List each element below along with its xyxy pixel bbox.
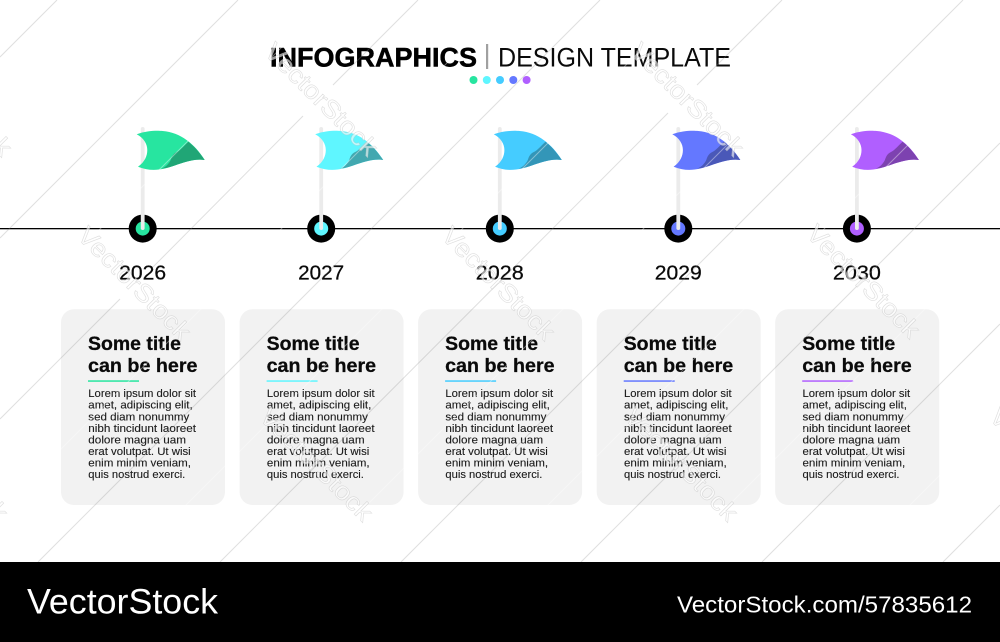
watermark: row 1: VectorStock — [259, 37, 384, 162]
panel: 2027 card: nibh tincidunt laoreet — [267, 423, 375, 435]
panel: 2027 card: quis nostrud exerci. — [267, 469, 364, 481]
year 2027: 2027 — [298, 262, 344, 284]
panel: 2026 card: sed diam nonummy — [88, 411, 190, 423]
panel: 2030 card — [775, 309, 939, 505]
panel: 2030 card: enim minim veniam, — [803, 457, 905, 469]
year 2028: 2028 — [476, 262, 524, 284]
milestone 2030 flag — [843, 127, 919, 243]
panel: 2027 card: dolore magna uam — [267, 434, 365, 446]
panel: 2028 card: nibh tincidunt laoreet — [445, 423, 553, 435]
panel: 2029 card: amet, adipiscing elit, — [624, 400, 728, 412]
panel: 2029 card: erat volutpat. Ut wisi — [624, 446, 726, 458]
watermark: row 3 — [0, 402, 1000, 527]
watermark: row 2 — [72, 219, 926, 346]
panel: 2028 card: erat volutpat. Ut wisi — [445, 446, 548, 458]
panel: 2028 card: quis nostrud exerci. — [445, 469, 542, 481]
panel: 2028 card: Some title — [445, 334, 538, 355]
title — [270, 42, 731, 72]
panel: 2029 card: can be here — [624, 356, 733, 377]
title: DESIGN TEMPLATE — [498, 42, 731, 72]
panel: 2026 card: amet, adipiscing elit, — [88, 400, 193, 412]
panel: 2030 card: amet, adipiscing elit, — [803, 400, 907, 412]
panel: 2026 card — [61, 309, 225, 505]
panel: 2028 card: amet, adipiscing elit, — [445, 400, 550, 412]
footer bar — [0, 562, 1000, 642]
watermark: row 3: VectorStock — [254, 402, 379, 527]
milestone 2029 flag — [664, 127, 740, 243]
watermark: row 2: VectorStock — [72, 221, 197, 346]
panel: 2027 card: enim minim veniam, — [267, 457, 370, 469]
milestone 2027 flag — [307, 127, 383, 243]
panel: 2026 card: enim minim veniam, — [88, 457, 191, 469]
watermark: row 3: VectorStock — [619, 402, 744, 527]
panel: 2027 card: Some title — [267, 334, 360, 355]
panel: 2028 card — [418, 309, 582, 505]
panel: 2030 card: nibh tincidunt laoreet — [803, 423, 910, 435]
panel: 2030 card: dolore magna uam — [803, 434, 900, 446]
panel: 2027 card: erat volutpat. Ut wisi — [267, 446, 369, 458]
year 2030: 2030 — [833, 262, 881, 284]
watermark: row 1: VectorStock — [625, 37, 750, 162]
panel: 2029 card — [597, 309, 761, 505]
panel: 2026 card: Lorem ipsum dolor sit — [88, 388, 196, 400]
panel: 2029 card: quis nostrud exerci. — [624, 469, 721, 481]
footer bar: VectorStock — [27, 582, 219, 621]
panel: 2030 card: sed diam nonummy — [803, 411, 904, 423]
panel: 2026 card: dolore magna uam — [88, 434, 186, 446]
panel: 2027 card: Lorem ipsum dolor sit — [267, 388, 375, 400]
panel: 2029 card: Some title — [624, 334, 717, 355]
panel: 2028 card: sed diam nonummy — [445, 411, 547, 423]
year 2026: 2026 — [119, 262, 166, 284]
panel: 2028 card: dolore magna uam — [445, 434, 543, 446]
watermark: row 2: VectorStock — [801, 219, 926, 344]
panel: 2026 card: can be here — [88, 356, 198, 377]
panel: 2026 card: Some title — [88, 334, 181, 355]
panel: 2028 card: enim minim veniam, — [445, 457, 548, 469]
panel: 2026 card: erat volutpat. Ut wisi — [88, 446, 191, 458]
panel: 2028 card: Lorem ipsum dolor sit — [445, 388, 553, 400]
milestone 2026 flag — [129, 127, 205, 243]
panel: 2029 card: dolore magna uam — [624, 434, 722, 446]
panel: 2030 card: can be here — [802, 356, 912, 377]
panel: 2026 card: nibh tincidunt laoreet — [88, 423, 196, 435]
panel: 2028 card: can be here — [445, 356, 555, 377]
watermark: row 2: VectorStock — [436, 221, 561, 346]
year 2029: 2029 — [655, 262, 702, 284]
panel: 2030 card: Some title — [802, 334, 895, 355]
panel: 2027 card: amet, adipiscing elit, — [267, 400, 371, 412]
footer bar: VectorStock.com/57835612 — [677, 592, 972, 618]
panel: 2029 card: enim minim veniam, — [624, 457, 727, 469]
watermark: row 1 — [0, 37, 1000, 162]
panel: 2027 card: can be here — [267, 356, 376, 377]
panel: 2030 card: quis nostrud exerci. — [803, 469, 900, 481]
panel: 2026 card: quis nostrud exerci. — [88, 469, 185, 481]
milestone 2028 flag — [486, 127, 562, 243]
panel: 2027 card — [240, 309, 404, 505]
title colour dots — [470, 76, 531, 84]
panel: 2029 card: nibh tincidunt laoreet — [624, 423, 732, 435]
timeline axis — [0, 228, 1000, 229]
panel: 2030 card: Lorem ipsum dolor sit — [803, 388, 910, 400]
panel: 2029 card: Lorem ipsum dolor sit — [624, 388, 732, 400]
panel: 2030 card: erat volutpat. Ut wisi — [803, 446, 905, 458]
panel: 2027 card: sed diam nonummy — [267, 411, 369, 423]
panel: 2029 card: sed diam nonummy — [624, 411, 726, 423]
title: INFOGRAPHICS — [270, 42, 477, 72]
